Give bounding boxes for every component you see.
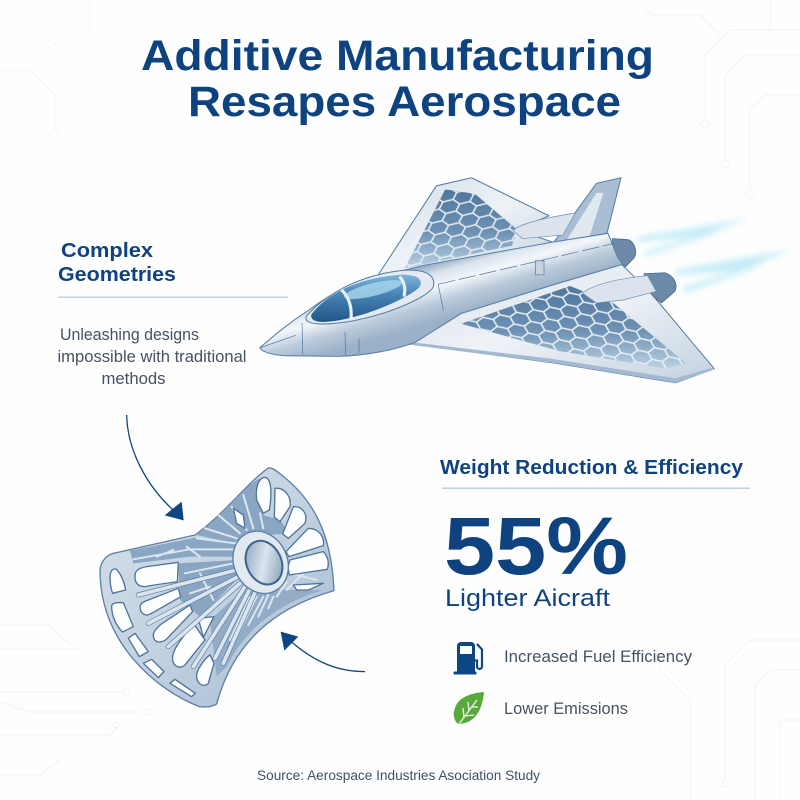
arrow: pointing to lattice part from lower right — [281, 632, 365, 672]
description text: impossible with traditional — [58, 347, 246, 366]
radial spokes — [138, 570, 255, 667]
fuselage — [260, 233, 623, 356]
shaded inner lattice: lower fan — [210, 587, 323, 677]
canopy highlight — [343, 276, 404, 303]
tail fin — [553, 178, 621, 243]
circuit pattern: bottom left — [0, 625, 152, 775]
upper wing — [377, 178, 552, 277]
description text: Unleashing designs — [60, 325, 199, 344]
exhaust trails — [637, 217, 792, 293]
divider line — [58, 296, 288, 298]
title: Additive Manufacturing — [141, 32, 654, 80]
lower wing — [380, 262, 714, 383]
hub — [223, 522, 298, 603]
description text — [58, 325, 246, 388]
arrow: pointing to lattice part from upper left — [127, 415, 184, 520]
text: lower emissions: Lower Emissions — [504, 700, 628, 718]
title — [141, 32, 654, 126]
illustration: jet aircraft — [260, 178, 792, 383]
title: Resapes Aerospace — [188, 78, 621, 126]
panel lines — [261, 244, 612, 355]
illustration: lattice part — [100, 468, 334, 707]
engines — [612, 239, 676, 303]
heading: complex geometries: Complex — [61, 239, 154, 262]
source note: Source: Aerospace Industries Asociation Study — [257, 768, 540, 783]
hub bore — [239, 535, 289, 591]
upper air intake — [513, 213, 575, 239]
lattice openings — [110, 477, 328, 697]
heading: complex geometries: Geometries — [58, 263, 176, 286]
circuit pattern: top right — [645, 0, 800, 198]
cockpit frame — [306, 270, 434, 324]
description text: methods — [102, 369, 166, 388]
wing edge strip — [389, 340, 714, 383]
panel: complex geometries — [58, 239, 288, 388]
statistic: 55% — [444, 501, 628, 592]
icon: fuel pump — [454, 642, 482, 674]
panel: weight reduction and efficiency — [440, 457, 750, 724]
statistic label: Lighter Aicraft — [445, 585, 610, 612]
upper wing honeycomb — [405, 189, 517, 268]
lower air intake — [582, 276, 656, 303]
shaded inner lattice: upper left — [130, 537, 237, 563]
icon: leaf — [454, 692, 484, 724]
circuit pattern: bottom right — [656, 640, 800, 800]
part body — [100, 468, 334, 707]
divider line — [442, 488, 750, 489]
circuit pattern: top left — [0, 0, 110, 138]
lattice strands — [133, 495, 317, 640]
text: fuel efficiency: Increased Fuel Efficiency — [504, 648, 693, 666]
heading: complex geometries — [58, 239, 176, 286]
canopy frames — [341, 277, 405, 319]
heading: weight reduction: Weight Reduction & Efficiency — [440, 457, 744, 479]
lower wing honeycomb — [461, 286, 686, 369]
canopy glass — [311, 275, 421, 322]
shaded inner lattice: centre — [178, 560, 240, 617]
shaded inner lattice: upper right — [197, 478, 290, 543]
